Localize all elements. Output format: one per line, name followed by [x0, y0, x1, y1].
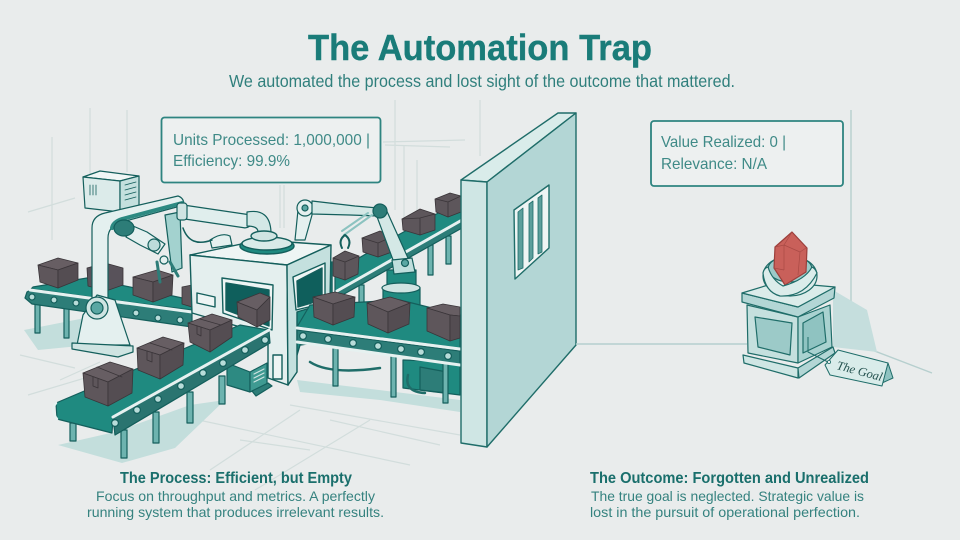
text block: the process: Focus on throughput and metrics. A perfectly — [96, 488, 375, 504]
processing machine — [190, 231, 332, 385]
title: The Automation Trap — [308, 27, 652, 68]
callout: process metrics: Efficiency: 99.9% — [173, 153, 290, 170]
callout: outcome metrics: Relevance: N/A — [661, 156, 767, 173]
pedestal with gem — [742, 232, 877, 378]
text block: the process: The Process: Efficient, but Empty — [120, 470, 352, 487]
back-left conveyor — [25, 258, 192, 338]
text block: the process — [87, 470, 384, 520]
callout: outcome metrics: Value Realized: 0 | — [661, 134, 786, 151]
text block: the outcome: The Outcome: Forgotten and Unrealized — [590, 470, 869, 487]
text block: the outcome: lost in the pursuit of operational perfection. — [590, 504, 860, 520]
illustration: automated factory line — [24, 171, 462, 463]
floor and wall lines: outcome room — [576, 110, 932, 373]
callout: outcome metrics — [651, 121, 843, 186]
text block: the process: running system that produces irrelevant results. — [87, 504, 384, 520]
right robot arm — [295, 200, 420, 318]
callout: process metrics — [162, 118, 380, 182]
back-right conveyor — [333, 193, 462, 315]
text block: the outcome — [590, 470, 869, 520]
right conveyor — [297, 292, 460, 403]
tag: The Goal: The Goal — [835, 358, 885, 384]
robot arm: left with control box — [72, 171, 184, 357]
motor under front conveyor — [227, 363, 272, 396]
subtitle: We automated the process and lost sight of the outcome that mattered. — [229, 71, 735, 91]
pipe and elbow — [177, 203, 271, 248]
text block: the outcome: The true goal is neglected. Strategic value is — [591, 488, 864, 504]
callout: process metrics: Units Processed: 1,000,000 | — [173, 132, 370, 149]
wall blocking the view — [461, 113, 576, 447]
front conveyor — [53, 293, 270, 458]
tag: The Goal — [808, 337, 893, 386]
